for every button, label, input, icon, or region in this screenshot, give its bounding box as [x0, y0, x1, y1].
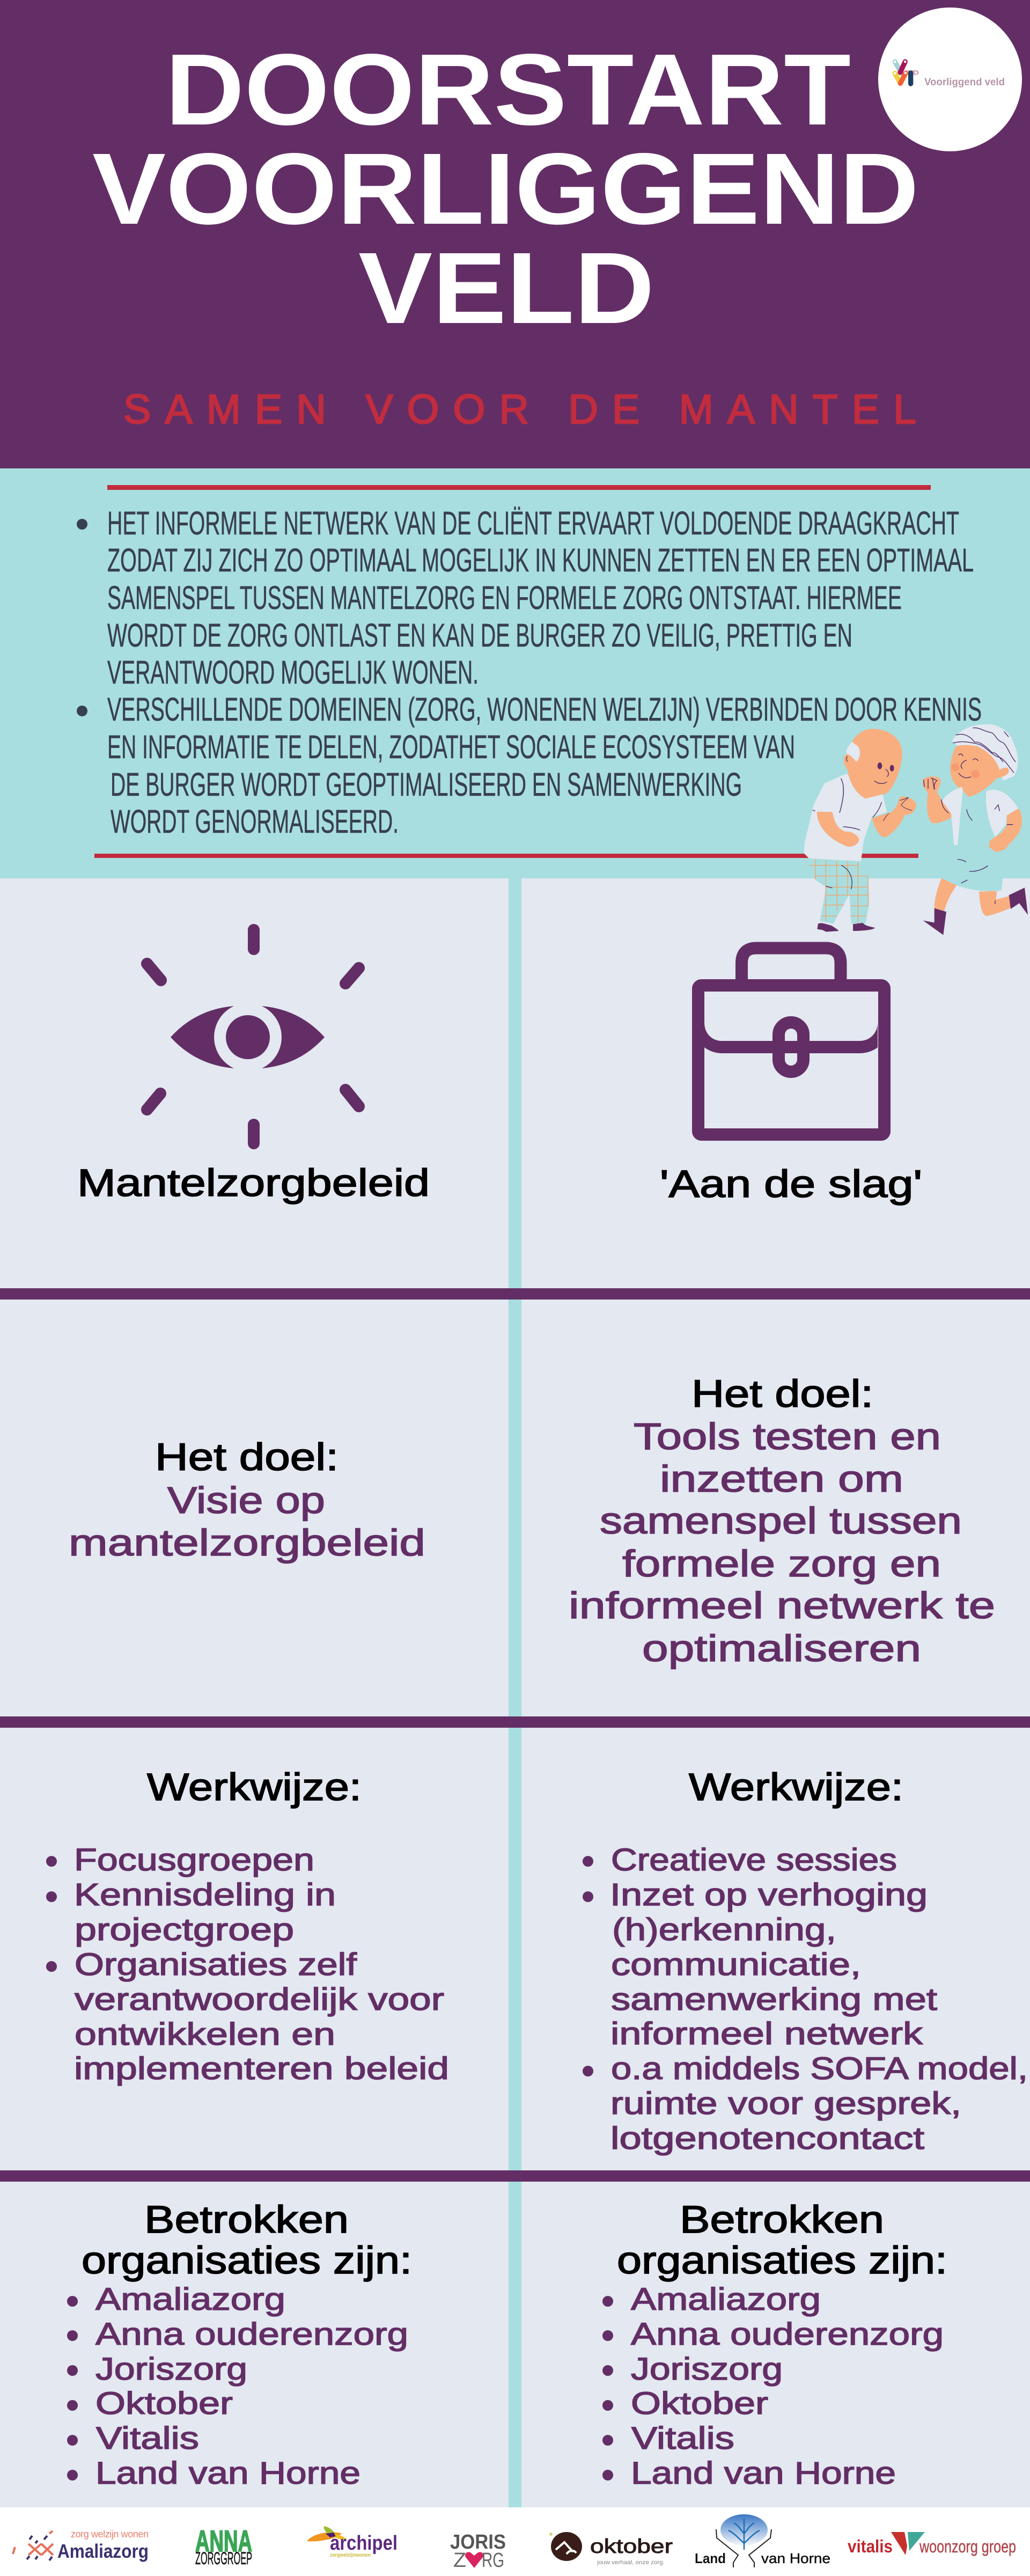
panel: Aan de slag header — [660, 948, 922, 1206]
list: werkwijze rechts: communicatie, — [611, 1947, 861, 1982]
panel: header — [0, 0, 1030, 468]
list: werkwijze rechts — [583, 1843, 1028, 2156]
title: VOORLIGGEND — [92, 133, 919, 246]
list: organisaties rechts: Oktober — [631, 2386, 768, 2421]
heading: Werkwijze: Werkwijze: — [689, 1766, 903, 1809]
logo: Archipel: zorgwelzijnwonen — [330, 2552, 371, 2558]
footer: partner logos — [13, 2514, 1016, 2572]
logo: Anna Zorggroep: ZORGGROEP — [195, 2549, 252, 2568]
list: organisaties links: Joriszorg — [95, 2352, 247, 2387]
title: VELD — [358, 232, 654, 345]
logo: Oktober: oktober — [590, 2535, 673, 2557]
list: organisaties links: Anna ouderenzorg — [95, 2317, 408, 2352]
heading: Betrokken organisaties: organisaties zijn: — [82, 2240, 412, 2282]
logo: Oktober: jouw verhaal, onze zorg. — [597, 2559, 665, 2566]
icon: briefcase — [698, 948, 884, 1134]
heading: Het doel: Het doel: — [155, 1436, 339, 1479]
doel text: Tools testen en — [634, 1415, 941, 1457]
logo: Anna Zorggroep — [195, 2524, 252, 2568]
heading: Betrokken organisaties — [617, 2199, 947, 2282]
logo: Amaliazorg: Amaliazorg — [57, 2540, 149, 2562]
list: organisaties links: Amaliazorg — [95, 2282, 285, 2317]
logo: Amaliazorg: zorg welzijn wonen — [71, 2529, 149, 2540]
doel text: optimaliseren — [642, 1627, 921, 1669]
doel text: samenspel tussen — [600, 1500, 962, 1542]
logo: Archipel — [307, 2526, 398, 2558]
title: DOORSTART — [165, 33, 851, 146]
list: organisaties rechts: Amaliazorg — [631, 2282, 821, 2317]
list: werkwijze rechts: ruimte voor gesprek, — [610, 2086, 961, 2121]
list: werkwijze rechts: lotgenotencontact — [610, 2121, 924, 2156]
list: organisaties rechts — [602, 2282, 944, 2491]
doel text: inzetten om — [660, 1458, 903, 1500]
subtitle: SAMEN VOOR DE MANTEL — [123, 386, 916, 432]
man — [804, 729, 916, 932]
heading: Werkwijze: Werkwijze: — [147, 1766, 362, 1809]
list: werkwijze rechts: Inzet op verhoging — [610, 1877, 928, 1912]
doel text: mantelzorgbeleid — [69, 1522, 425, 1564]
doel text: formele zorg en — [622, 1543, 941, 1584]
doel text: Visie op — [167, 1479, 325, 1521]
logo: Oktober — [549, 2532, 673, 2566]
list: werkwijze links: ontwikkelen en — [75, 2017, 335, 2052]
heading: Het doel: Het doel: — [691, 1373, 873, 1415]
panel: organisaties links — [67, 2199, 412, 2491]
panel: intro — [0, 468, 1030, 878]
top red rule — [107, 485, 931, 490]
doel text: informeel netwerk te — [569, 1584, 995, 1626]
bottom red rule — [94, 854, 918, 858]
panel: organisaties rechts — [602, 2199, 947, 2491]
intro text — [107, 505, 982, 840]
list: organisaties links: Land van Horne — [95, 2456, 360, 2491]
panel: werkwijze links — [46, 1766, 449, 2086]
logo: Joris Zorg — [450, 2531, 506, 2572]
heading: Mantelzorgbeleid: Mantelzorgbeleid — [77, 1162, 430, 1205]
woman — [923, 724, 1028, 935]
logo: Voorliggend veld — [878, 8, 1022, 151]
list: werkwijze rechts: samenwerking met — [611, 1982, 937, 2017]
logo: Vitalis woonzorg groep: vitalis — [848, 2536, 893, 2556]
list: werkwijze links: projectgroep — [75, 1912, 294, 1947]
list: werkwijze links: verantwoordelijk voor — [75, 1982, 444, 2017]
logo: Amaliazorg — [13, 2529, 149, 2562]
list: werkwijze links: Kennisdeling in — [74, 1877, 336, 1912]
list: werkwijze links: Organisaties zelf — [75, 1947, 357, 1982]
list: organisaties rechts: Land van Horne — [631, 2456, 896, 2491]
list: organisaties links: Vitalis — [96, 2421, 199, 2456]
list: werkwijze rechts: (h)erkenning, — [612, 1912, 836, 1947]
heading: Betrokken organisaties: organisaties zijn: — [617, 2240, 947, 2282]
heading: Aan de slag: 'Aan de slag' — [660, 1163, 922, 1206]
logo: Land van Horne: Land — [695, 2550, 726, 2566]
panel: doel rechts — [569, 1373, 995, 1669]
heading: Betrokken organisaties — [82, 2199, 412, 2282]
logo: Voorliggend veld: Voorliggend veld — [924, 77, 1005, 88]
panel: Mantelzorgbeleid header — [77, 930, 430, 1205]
list: werkwijze links — [46, 1843, 449, 2086]
list: organisaties links — [67, 2282, 408, 2491]
logo: Vitalis woonzorg groep — [848, 2532, 1016, 2556]
intro text: VERANTWOORD MOGELIJK WONEN. — [107, 654, 479, 691]
heading: Betrokken organisaties: Betrokken — [680, 2199, 884, 2241]
icon: eye with rays — [147, 930, 359, 1143]
list: werkwijze rechts: o.a middels SOFA model, — [611, 2051, 1028, 2086]
logo: Land van Horne — [695, 2514, 830, 2567]
illustration: elderly couple — [804, 724, 1028, 935]
logo: Land van Horne: van Horne — [761, 2550, 830, 2566]
title — [92, 33, 919, 345]
logo: Joris Zorg: Z — [453, 2549, 466, 2572]
list: werkwijze rechts: informeel netwerk — [610, 2016, 923, 2051]
list: organisaties rechts: Vitalis — [631, 2421, 734, 2456]
doel text — [69, 1479, 425, 1564]
list: organisaties rechts: Anna ouderenzorg — [631, 2317, 944, 2352]
list: werkwijze links: implementeren beleid — [74, 2051, 449, 2086]
list: werkwijze links: Focusgroepen — [74, 1843, 314, 1877]
intro text: WORDT GENORMALISEERD. — [111, 803, 399, 840]
list: organisaties rechts: Joriszorg — [631, 2352, 783, 2387]
panels: two columns background — [0, 878, 1030, 2507]
list: werkwijze rechts: Creatieve sessies — [611, 1843, 897, 1877]
logo: Joris Zorg: JORIS — [450, 2531, 506, 2553]
logo: Joris Zorg: RG — [482, 2549, 504, 2572]
heading: Betrokken organisaties: Betrokken — [144, 2199, 349, 2241]
logo: Anna Zorggroep: ANNA — [195, 2524, 252, 2558]
logo: Archipel: archipel — [330, 2532, 398, 2555]
panel: doel links — [69, 1436, 425, 1564]
doel text — [569, 1415, 995, 1669]
panel: werkwijze rechts — [583, 1766, 1028, 2156]
intro bullets — [77, 519, 87, 716]
list: organisaties links: Oktober — [95, 2386, 233, 2421]
